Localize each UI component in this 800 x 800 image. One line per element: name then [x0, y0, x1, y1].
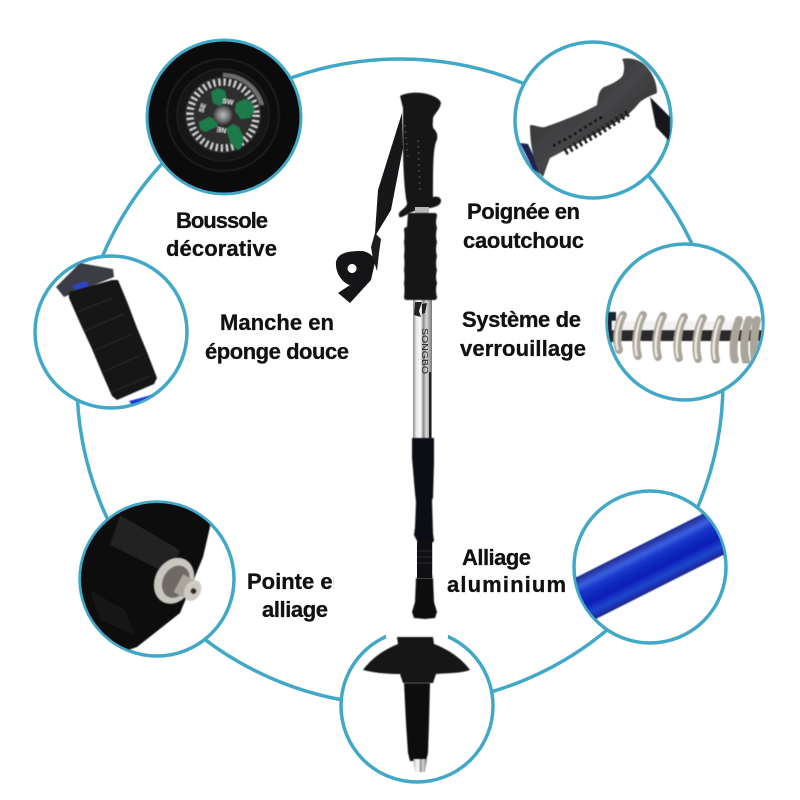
icon: rubber foot	[412, 578, 437, 619]
icon: grey flare	[56, 263, 114, 297]
icon: brand logo	[414, 302, 427, 317]
label: locking system: verrouillage	[460, 336, 586, 361]
icon: grip ribs	[553, 117, 602, 146]
icon: strap buckle	[336, 251, 375, 303]
icon: dark end cap	[606, 312, 616, 342]
icon: spring coils	[617, 315, 757, 361]
compass dial: SE	[198, 102, 208, 114]
icon: pole handle	[399, 93, 441, 217]
panel: alloy point detail	[78, 500, 236, 658]
label: aluminium alloy	[447, 545, 566, 597]
label: foam handle: Manche en	[220, 310, 334, 335]
icon: metal point	[153, 557, 202, 604]
icon: blue tube	[576, 513, 724, 620]
label: compass: Boussole	[176, 208, 268, 233]
label: foam handle: éponge douce	[205, 339, 349, 364]
icon: foam sleeve	[69, 280, 157, 400]
ring gap above basket	[386, 622, 448, 638]
label: alloy point: Pointe en	[247, 569, 346, 594]
label: alloy point: alliage	[262, 597, 328, 622]
icon: basket shaft	[404, 683, 430, 761]
label: foam handle	[205, 310, 349, 364]
label: alloy point	[247, 568, 358, 622]
label: locking system: Système de	[462, 307, 581, 332]
trekking pole	[336, 93, 441, 619]
icon: silver collar	[415, 207, 429, 214]
compass dial	[167, 59, 279, 171]
label: rubber grip	[463, 199, 584, 253]
label: compass	[166, 208, 277, 261]
icon: foam sleeve	[404, 213, 437, 300]
panel: compass detail	[147, 40, 301, 194]
panel: locking spring detail	[606, 244, 763, 400]
panel: soft foam handle detail	[35, 256, 187, 410]
label: rubber grip: caoutchouc	[463, 228, 584, 253]
compass dial: NE	[216, 125, 227, 133]
icon: blue collars	[72, 281, 89, 290]
icon: lower section	[412, 438, 434, 577]
panel: basket tip detail	[341, 622, 493, 782]
icon: metal tip	[413, 759, 427, 772]
icon: grip body	[530, 58, 657, 177]
panel: rubber grip detail	[515, 42, 671, 198]
connecting ring	[77, 59, 723, 705]
icon: silver shaft	[413, 298, 432, 439]
icon: blue collar	[520, 143, 543, 176]
icon: basket	[363, 637, 470, 683]
icon: strap	[650, 97, 670, 142]
label: locking system	[460, 307, 586, 361]
label: compass: décorative	[166, 236, 277, 261]
label: aluminium alloy: aluminium	[447, 572, 566, 597]
icon: wrist strap	[374, 113, 403, 238]
label: aluminium alloy: Alliage	[462, 545, 531, 570]
icon: black tip body	[81, 503, 211, 650]
panel: aluminium alloy detail	[572, 489, 728, 645]
icon: spring rod	[612, 321, 762, 330]
label: rubber grip: Poignée en	[467, 199, 580, 224]
brand name: SONGBO	[420, 328, 429, 374]
compass dial: SW	[222, 98, 234, 107]
